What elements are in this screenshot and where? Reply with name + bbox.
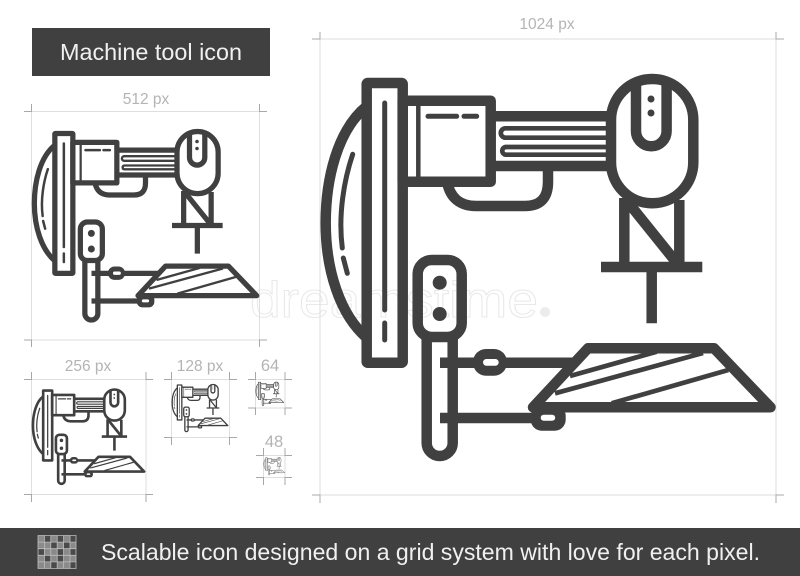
footer bar [0,528,800,576]
icon: pixel grid [38,536,76,568]
icon: machine tool 64 [256,382,284,406]
panel: 256 px icon [24,358,153,502]
icon: machine tool 512 [34,132,257,320]
title banner [32,28,270,76]
panel: 48 px icon [256,433,292,485]
label: 64: 64 [261,357,279,375]
icon: machine tool 256 [33,390,144,484]
watermark: dreamstime [250,272,538,328]
label: 1024 px: 1024 px [519,16,575,33]
icon: machine tool large [326,79,770,456]
icon: machine tool 48 [264,457,285,475]
label: 256 px: 256 px [65,358,112,375]
footer caption: Scalable icon designed on a grid system with love for each pixel. [101,539,760,565]
panel: 64 px icon [248,357,292,415]
label: 48: 48 [265,433,283,451]
label: 128 px: 128 px [177,358,224,375]
panel: 512 px icon [24,91,267,347]
title banner: Machine tool icon [60,39,242,65]
panel: 128 px icon [164,358,237,445]
label: 512 px: 512 px [123,91,170,108]
icon: machine tool 128 [172,384,228,432]
